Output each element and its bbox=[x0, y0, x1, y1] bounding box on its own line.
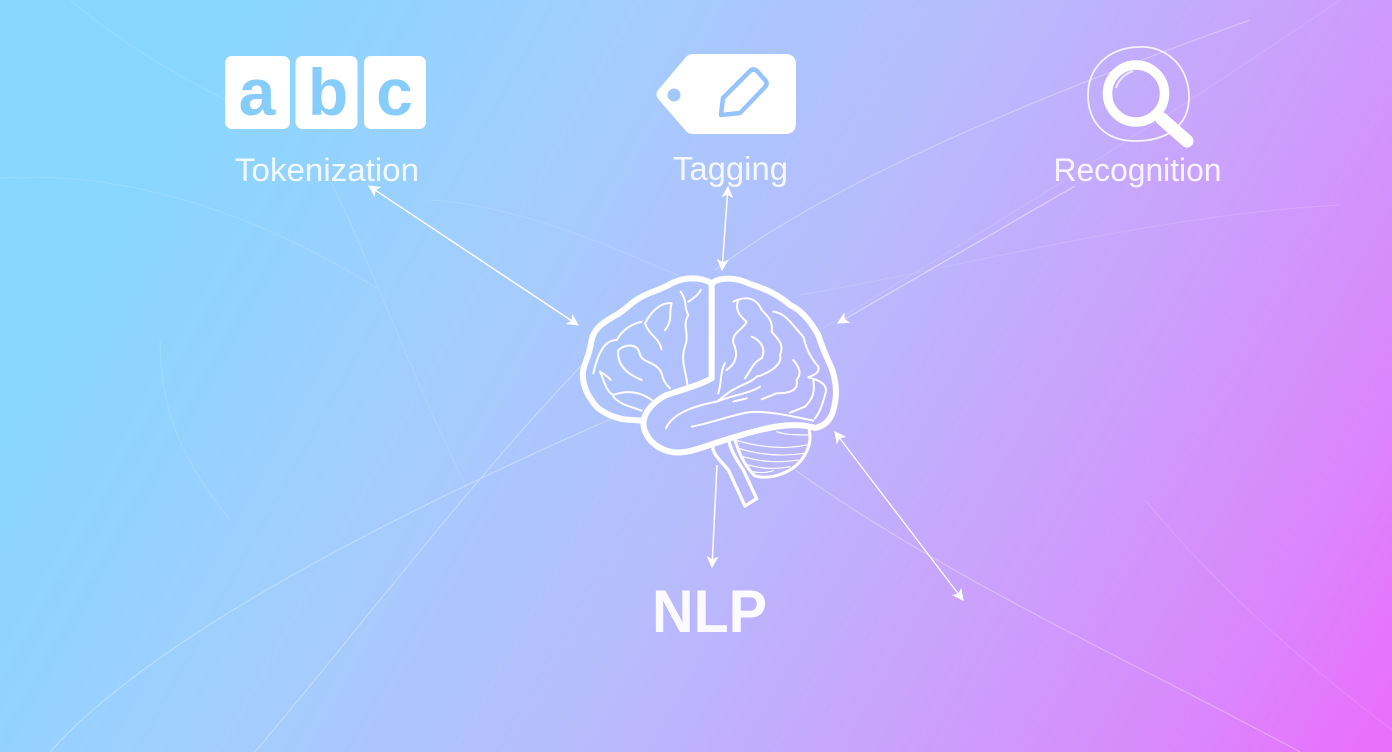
brain stem bbox=[713, 443, 757, 506]
label: Recognition: Recognition bbox=[1054, 152, 1222, 188]
cerebellum folds bbox=[735, 432, 808, 473]
right hemisphere gyri bbox=[717, 298, 826, 418]
arrow: brain to Tagging bbox=[722, 187, 728, 270]
label: Tagging: Tagging bbox=[673, 150, 788, 187]
icon: abc letter tiles: a bbox=[239, 55, 277, 129]
temporal lobe folds bbox=[666, 387, 813, 428]
left hemisphere gyri bbox=[593, 290, 701, 411]
icon: magnifying glass bbox=[1088, 47, 1189, 141]
arrow: brain to lower right bbox=[835, 432, 963, 600]
title: NLP: NLP bbox=[652, 578, 767, 645]
arrow: brain to NLP bbox=[712, 465, 717, 567]
icon: abc letter tiles bbox=[225, 55, 426, 129]
icon: brain bbox=[583, 278, 836, 506]
arrow: Recognition to brain bbox=[838, 186, 1075, 323]
icon: abc letter tiles: c bbox=[376, 55, 413, 129]
brain outer outline bbox=[583, 278, 836, 453]
label: Tokenization: Tokenization bbox=[235, 152, 419, 188]
icon: tag with pencil bbox=[656, 54, 796, 134]
tokenization group bbox=[225, 55, 426, 188]
arrow: brain to Tokenization bbox=[369, 186, 578, 325]
icon: abc letter tiles: b bbox=[308, 55, 348, 129]
tagging group bbox=[656, 54, 796, 187]
cerebellum bbox=[735, 431, 810, 477]
recognition group bbox=[1054, 47, 1222, 188]
